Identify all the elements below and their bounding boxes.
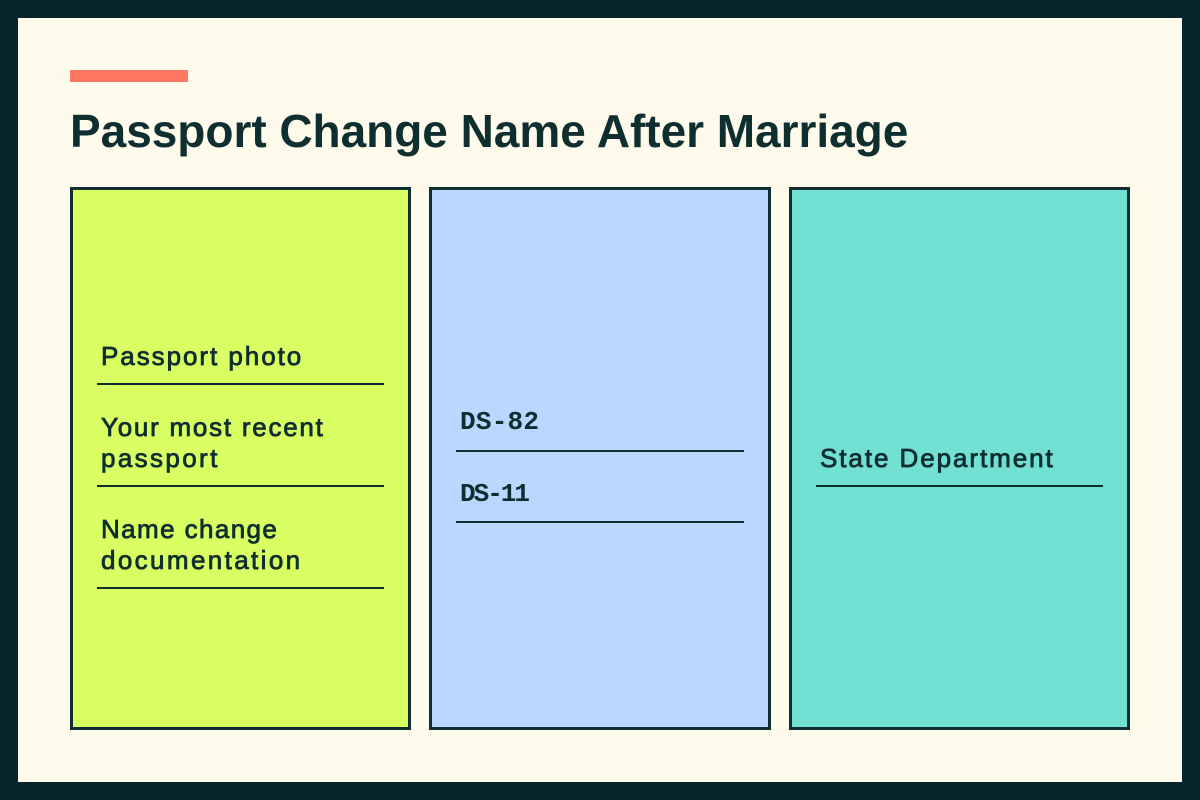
- text: DS-11: DS-11: [460, 479, 528, 509]
- title: Passport Change Name After Marriage: [70, 105, 908, 157]
- accent bar: [70, 70, 188, 82]
- panel background: [429, 187, 771, 730]
- text: most recent passport: passport: [101, 443, 220, 473]
- text: most recent passport: [100, 412, 325, 473]
- text: DS-82: DS-82: [460, 407, 539, 437]
- panel background: [70, 187, 411, 730]
- text: State Department: State Department: [820, 443, 1055, 473]
- text: most recent passport: Your most recent: [101, 412, 325, 442]
- text: name change documentation: documentation: [101, 545, 303, 575]
- panel: documents: [70, 187, 411, 730]
- text: name change documentation: Name change: [101, 514, 278, 544]
- panel: forms: [429, 187, 771, 730]
- text: name change documentation: [101, 514, 303, 575]
- text: passport photo: Passport photo: [101, 341, 303, 371]
- panel: where to apply: [789, 187, 1130, 730]
- panel background: [789, 187, 1130, 730]
